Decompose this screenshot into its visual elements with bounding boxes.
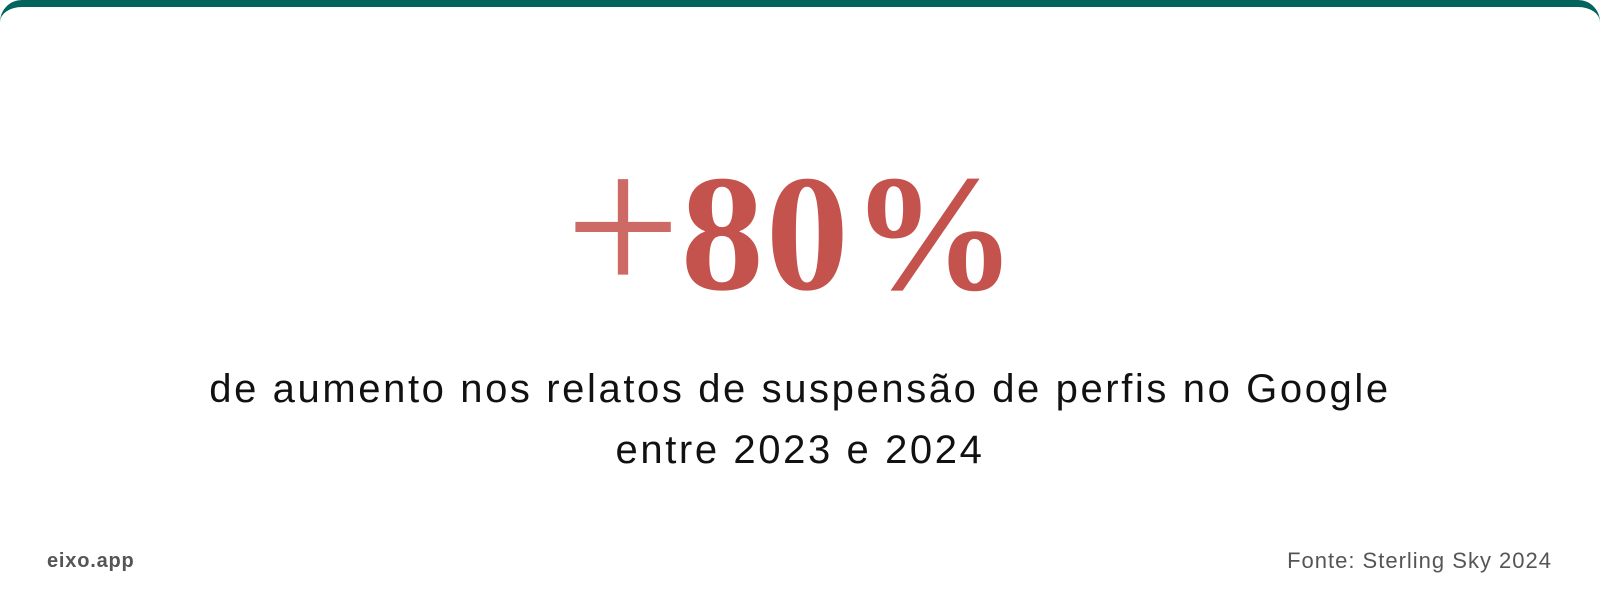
subtitle text: de aumento nos relatos de suspensão de perfis no Google xyxy=(209,367,1391,411)
big number: +80% xyxy=(565,113,1019,340)
subtitle text xyxy=(209,367,1391,472)
footer source: Fonte: Sterling Sky 2024 xyxy=(1287,548,1552,573)
footer brand: eixo.app xyxy=(47,550,135,572)
subtitle text: entre 2023 e 2024 xyxy=(616,428,984,472)
